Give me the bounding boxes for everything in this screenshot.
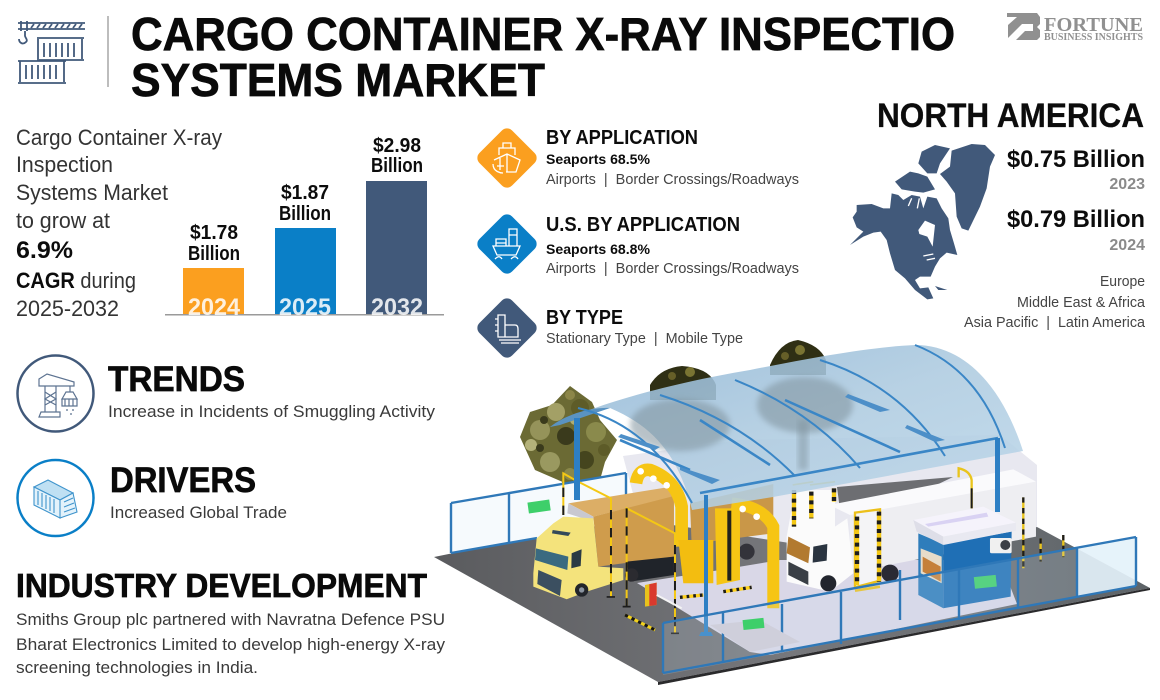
market growth text: CAGR during [16,268,136,293]
guard booth [913,507,1016,608]
bar chart: market size: 2025 [279,294,331,321]
title [131,8,955,106]
icon: type diamond with scanner [474,295,540,361]
logo: Fortune Business Insights [1007,13,1143,43]
canopy columns [574,418,1000,636]
segment: U.S. by application: Airports | Border Crossings/Roadways [546,261,799,277]
market growth text: to grow at [16,208,110,233]
yellow scanner gates [636,468,773,608]
bar chart: market size: $1.78 [190,222,238,244]
market growth text: 2025-2032 [16,296,119,321]
segment: by type: Stationary Type | Mobile Type [546,331,743,347]
industry development: Bharat Electronics Limited to develop high-energy X-ray [16,635,446,654]
regional values: 2024 [1109,237,1145,254]
header icon: crane and containers [18,21,85,83]
bar chart: market size: 2024 [188,294,241,321]
market growth text: Systems Market [16,180,168,205]
bar chart: market size: $1.87 [281,182,329,204]
region heading: NORTH AMERICA [877,97,1144,135]
regional values [1007,146,1145,254]
bar chart: market size: Billion [188,243,240,265]
segment: by type: BY TYPE [546,307,623,329]
drivers text: Increased Global Trade [110,503,287,522]
bar chart: market size: Billion [279,203,331,225]
logo: Fortune Business Insights: BUSINESS INSIGHTS [1044,32,1143,43]
industry development: INDUSTRY DEVELOPMENT [16,567,427,604]
icon: U.S. application diamond with cargo ship [474,211,540,277]
yellow truck cab [533,517,623,599]
segment: U.S. by application: U.S. BY APPLICATION [546,214,740,236]
icon: drivers container [18,460,94,536]
bar chart: market size: 2032 [371,294,423,321]
back structures [623,435,1037,560]
segment: by application [546,127,799,188]
segment: by application: BY APPLICATION [546,127,698,149]
regional values: 2023 [1109,176,1145,193]
segment: by application: Seaports 68.5% [546,151,651,167]
title: CARGO CONTAINER X-RAY INSPECTIO [131,8,955,60]
other regions: Middle East & Africa [1017,295,1146,311]
trees [520,340,826,500]
drivers text [110,461,287,522]
market growth text: 6.9% [16,237,73,264]
market growth text: Inspection [16,152,113,177]
logo: Fortune Business Insights: FORTUNE [1044,14,1143,36]
orange trailer [567,484,773,582]
segment: U.S. by application [546,214,799,277]
front fence [663,537,1136,675]
raised platform [637,560,1017,655]
trends text: Increase in Incidents of Smuggling Activity [108,402,436,421]
title: SYSTEMS MARKET [131,54,545,106]
other regions: Europe [1100,274,1145,290]
industry development: screening technologies in India. [16,658,258,677]
bar chart: market size [165,135,444,321]
market growth text [16,125,222,321]
other regions [964,274,1146,331]
ground slab [434,475,1150,682]
segment: by type [546,307,743,347]
illustration: inspection facility [434,340,1150,685]
regional values: $0.75 Billion [1007,146,1145,173]
small right posts [959,468,1063,568]
icon: trends crane [18,356,94,432]
bar chart: market size: Billion [371,155,423,177]
trends text [108,360,436,421]
segment: U.S. by application: Seaports 68.8% [546,241,651,257]
white truck [787,469,1036,592]
trends text: TRENDS [108,360,245,399]
hazard posts and barrier [563,473,682,633]
map: North America [850,144,995,299]
industry development [16,567,446,677]
drivers text: DRIVERS [110,461,256,500]
front platform sign [710,618,800,652]
market growth text: Cargo Container X-ray [16,125,222,150]
icon: application diamond with ship [474,125,540,191]
regional values: $0.79 Billion [1007,206,1145,233]
other regions: Asia Pacific | Latin America [964,315,1146,331]
canopy roof [550,345,1023,510]
left fence [451,473,626,553]
bar chart: market size: $2.98 [373,135,421,157]
industry development: Smiths Group plc partnered with Navratna Defence PSU [16,610,445,629]
header divider [107,16,109,87]
segment: by application: Airports | Border Crossings/Roadways [546,172,799,188]
